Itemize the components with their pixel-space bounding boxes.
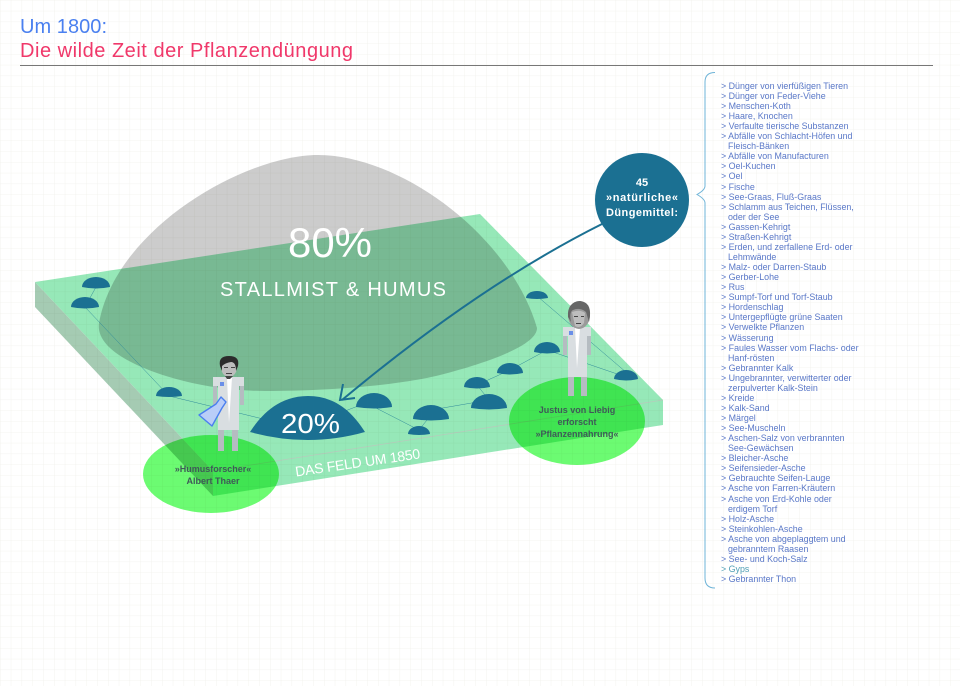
list of 45 fertilisers: > Gebrannter Thon <box>721 574 796 584</box>
list of 45 fertilisers <box>721 81 859 584</box>
network lines between soil mounds <box>85 287 627 430</box>
list of 45 fertilisers: > See-Graas, Fluß-Graas <box>721 192 822 202</box>
list of 45 fertilisers: > Aschen-Salz von verbrannten <box>721 433 845 443</box>
caption: Justus von Liebig: Justus von Liebig <box>539 405 615 415</box>
head: Liebig portrait <box>568 301 590 329</box>
list of 45 fertilisers: > Abfälle von Schlacht-Höfen und <box>721 131 853 141</box>
list of 45 fertilisers: > Haare, Knochen <box>721 111 793 121</box>
caption: Humusforscher Albert Thaer: Albert Thaer <box>186 476 240 486</box>
big mound: 20 percent <box>250 396 365 440</box>
list of 45 fertilisers: > Gassen-Kehrigt <box>721 222 791 232</box>
list of 45 fertilisers: > Rus <box>721 282 745 292</box>
list of 45 fertilisers: > Ungebrannter, verwitterter oder <box>721 373 852 383</box>
label: das Feld um 1850: DAS FELD UM 1850 <box>294 445 421 479</box>
field plane: das Feld um 1850 <box>35 214 663 496</box>
list of 45 fertilisers: > Fische <box>721 182 755 192</box>
small soil mounds <box>71 277 638 435</box>
list of 45 fertilisers: gebranntem Raasen <box>728 544 808 554</box>
circle: 45 natural fertilisers: »natürliche« <box>606 192 678 204</box>
big mound: 20 percent: 20% <box>281 408 340 439</box>
list of 45 fertilisers: > Holz-Asche <box>721 514 774 524</box>
list of 45 fertilisers: See-Gewächsen <box>728 443 794 453</box>
label: 80 percent: 80% <box>288 219 372 266</box>
figure: Albert Thaer <box>199 356 244 451</box>
list of 45 fertilisers: > Straßen-Kehrigt <box>721 232 792 242</box>
list of 45 fertilisers: > Oel-Kuchen <box>721 161 776 171</box>
circle: 45 natural fertilisers: 45 <box>636 177 648 189</box>
list of 45 fertilisers: zerpulverter Kalk-Stein <box>728 383 818 393</box>
circle: 45 natural fertilisers <box>595 153 689 247</box>
grey dome: 80 percent stallmist and humus <box>99 155 537 391</box>
list of 45 fertilisers: > Asche von Farren-Kräutern <box>721 483 835 493</box>
title: Die wilde Zeit der Pflanzendüngung <box>20 40 353 62</box>
list of 45 fertilisers: > Dünger von Feder-Viehe <box>721 91 826 101</box>
list of 45 fertilisers: > Seifensieder-Asche <box>721 463 806 473</box>
icon: flask <box>199 397 226 426</box>
list of 45 fertilisers: Hanf-rösten <box>728 353 774 363</box>
list of 45 fertilisers: > Gebrannter Kalk <box>721 363 794 373</box>
list of 45 fertilisers: > Gyps <box>721 564 750 574</box>
head: Thaer portrait <box>220 356 238 379</box>
list of 45 fertilisers: > Asche von abgeplaggtem und <box>721 534 846 544</box>
list of 45 fertilisers: oder der See <box>728 212 779 222</box>
list of 45 fertilisers: > Dünger von vierfüßigen Tieren <box>721 81 848 91</box>
list of 45 fertilisers: > Gebrauchte Seifen-Lauge <box>721 473 830 483</box>
caption: Justus von Liebig: erforscht <box>557 417 597 427</box>
caption: Humusforscher Albert Thaer <box>175 464 251 486</box>
list of 45 fertilisers: Lehmwände <box>728 252 776 262</box>
list of 45 fertilisers: > Faules Wasser vom Flachs- oder <box>721 343 859 353</box>
list of 45 fertilisers: > Schlamm aus Teichen, Flüssen, <box>721 202 854 212</box>
list of 45 fertilisers: > Verfaulte tierische Substanzen <box>721 121 849 131</box>
list of 45 fertilisers: > Bleicher-Asche <box>721 453 788 463</box>
list of 45 fertilisers: > Erden, und zerfallene Erd- oder <box>721 242 853 252</box>
list of 45 fertilisers: > Kreide <box>721 393 754 403</box>
caption: Justus von Liebig <box>535 405 619 439</box>
list of 45 fertilisers: > Hordenschlag <box>721 302 783 312</box>
list of 45 fertilisers: > Untergepflügte grüne Saaten <box>721 312 843 322</box>
title <box>20 16 353 62</box>
list of 45 fertilisers: > Steinkohlen-Asche <box>721 524 803 534</box>
list of 45 fertilisers: erdigem Torf <box>728 504 778 514</box>
brace <box>697 72 715 588</box>
list of 45 fertilisers: > Sumpf-Torf und Torf-Staub <box>721 292 833 302</box>
list of 45 fertilisers: > Malz- oder Darren-Staub <box>721 262 826 272</box>
caption: Humusforscher Albert Thaer: »Humusforscher« <box>175 464 251 474</box>
green spot: Liebig <box>509 377 645 465</box>
list of 45 fertilisers: > Abfälle von Manufacturen <box>721 151 829 161</box>
list of 45 fertilisers: Fleisch-Bänken <box>728 141 789 151</box>
list of 45 fertilisers: > See- und Koch-Salz <box>721 554 808 564</box>
list of 45 fertilisers: > Kalk-Sand <box>721 403 770 413</box>
label: Stallmist und Humus: STALLMIST & HUMUS <box>220 279 446 301</box>
list of 45 fertilisers: > Wässerung <box>721 333 774 343</box>
arrow from circle to 20 percent mound <box>340 224 602 400</box>
list of 45 fertilisers: > Asche von Erd-Kohle oder <box>721 494 832 504</box>
list of 45 fertilisers: > Gerber-Lohe <box>721 272 779 282</box>
green spot: Thaer <box>143 435 279 513</box>
caption: Justus von Liebig: »Pflanzennahrung« <box>535 429 619 439</box>
title: Um 1800: <box>20 16 107 38</box>
list of 45 fertilisers: > See-Muscheln <box>721 423 785 433</box>
list of 45 fertilisers: > Märgel <box>721 413 756 423</box>
list of 45 fertilisers: > Menschen-Koth <box>721 101 791 111</box>
circle: 45 natural fertilisers: Düngemittel: <box>606 207 678 219</box>
list of 45 fertilisers: > Oel <box>721 171 742 181</box>
list of 45 fertilisers: > Verwelkte Pflanzen <box>721 322 804 332</box>
figure: Justus von Liebig <box>563 301 591 396</box>
